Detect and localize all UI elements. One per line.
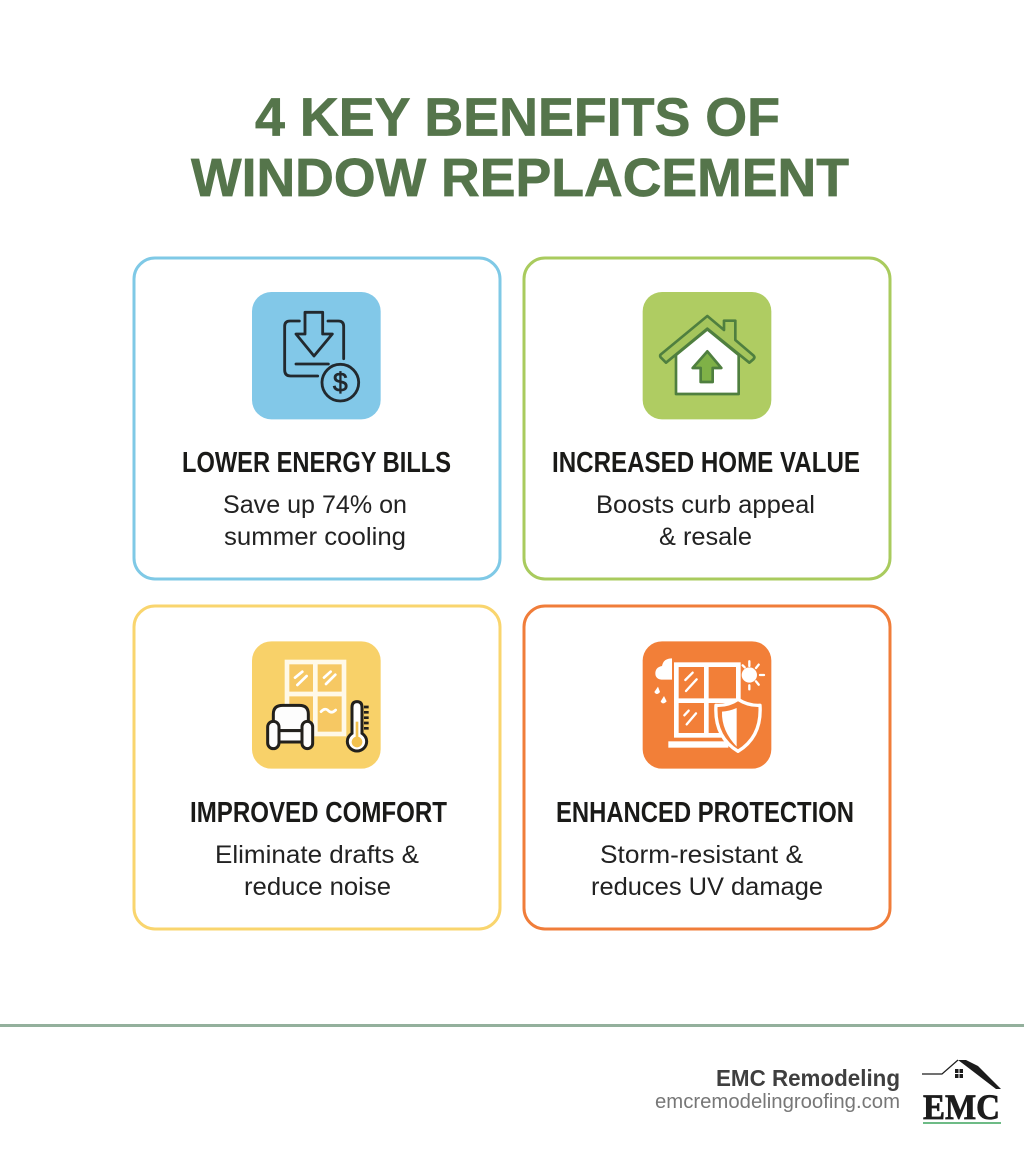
panel: improved comfort xyxy=(134,606,500,929)
heading: INCREASED HOME VALUE xyxy=(552,447,860,479)
description xyxy=(591,841,823,901)
logo: EMC house: EMC xyxy=(923,1087,1000,1127)
description: Eliminate drafts & xyxy=(215,841,419,869)
title: WINDOW REPLACEMENT xyxy=(191,148,849,208)
icon: window, armchair and thermometer xyxy=(252,641,381,769)
footer website: emcremodelingroofing.com xyxy=(655,1091,900,1113)
description: Boosts curb appeal xyxy=(596,491,815,519)
description: summer cooling xyxy=(224,523,406,551)
description: Save up 74% on xyxy=(223,491,407,519)
description: Storm-resistant & xyxy=(600,841,803,869)
panel: enhanced protection xyxy=(524,606,890,929)
icon: bill with down arrow and dollar xyxy=(252,292,381,419)
description: reduces UV damage xyxy=(591,873,823,901)
icon: bill with down arrow and dollar: $ xyxy=(333,368,348,398)
heading: IMPROVED COMFORT xyxy=(190,797,447,829)
description xyxy=(215,841,419,901)
description xyxy=(223,491,407,551)
title: 4 KEY BENEFITS OF xyxy=(255,88,780,148)
heading: LOWER ENERGY BILLS xyxy=(182,447,451,479)
description: & resale xyxy=(659,523,752,551)
panel: lower energy bills xyxy=(134,258,500,579)
logo: EMC house xyxy=(922,1060,1001,1127)
footer company name: EMC Remodeling xyxy=(716,1065,900,1091)
heading: ENHANCED PROTECTION xyxy=(556,797,854,829)
description: reduce noise xyxy=(244,873,391,901)
icon: window, weather and shield xyxy=(643,641,771,769)
footer divider xyxy=(0,1024,1024,1027)
title xyxy=(191,88,849,208)
icon: house with up arrow xyxy=(643,292,771,419)
panel: increased home value xyxy=(524,258,890,579)
description xyxy=(596,491,815,551)
